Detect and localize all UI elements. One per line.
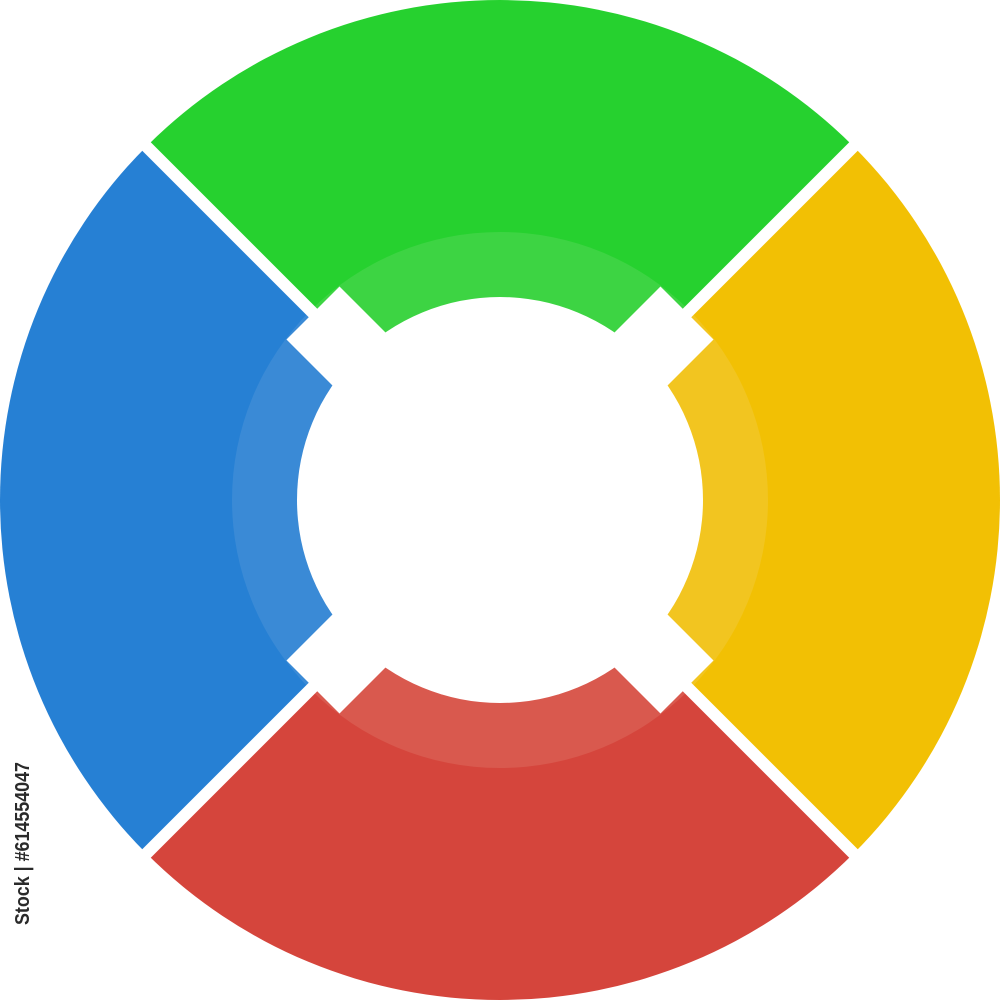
- segment: yellow right: [500, 146, 1000, 854]
- gaps between segments: [130, 130, 870, 870]
- segment: green top: [146, 0, 854, 500]
- watermark id text: Stock | #614554047: [12, 762, 34, 925]
- centre hole: [297, 297, 703, 703]
- notches near centre: [313, 313, 687, 687]
- segment: blue left: [0, 146, 500, 854]
- segment: red bottom: [146, 500, 854, 1000]
